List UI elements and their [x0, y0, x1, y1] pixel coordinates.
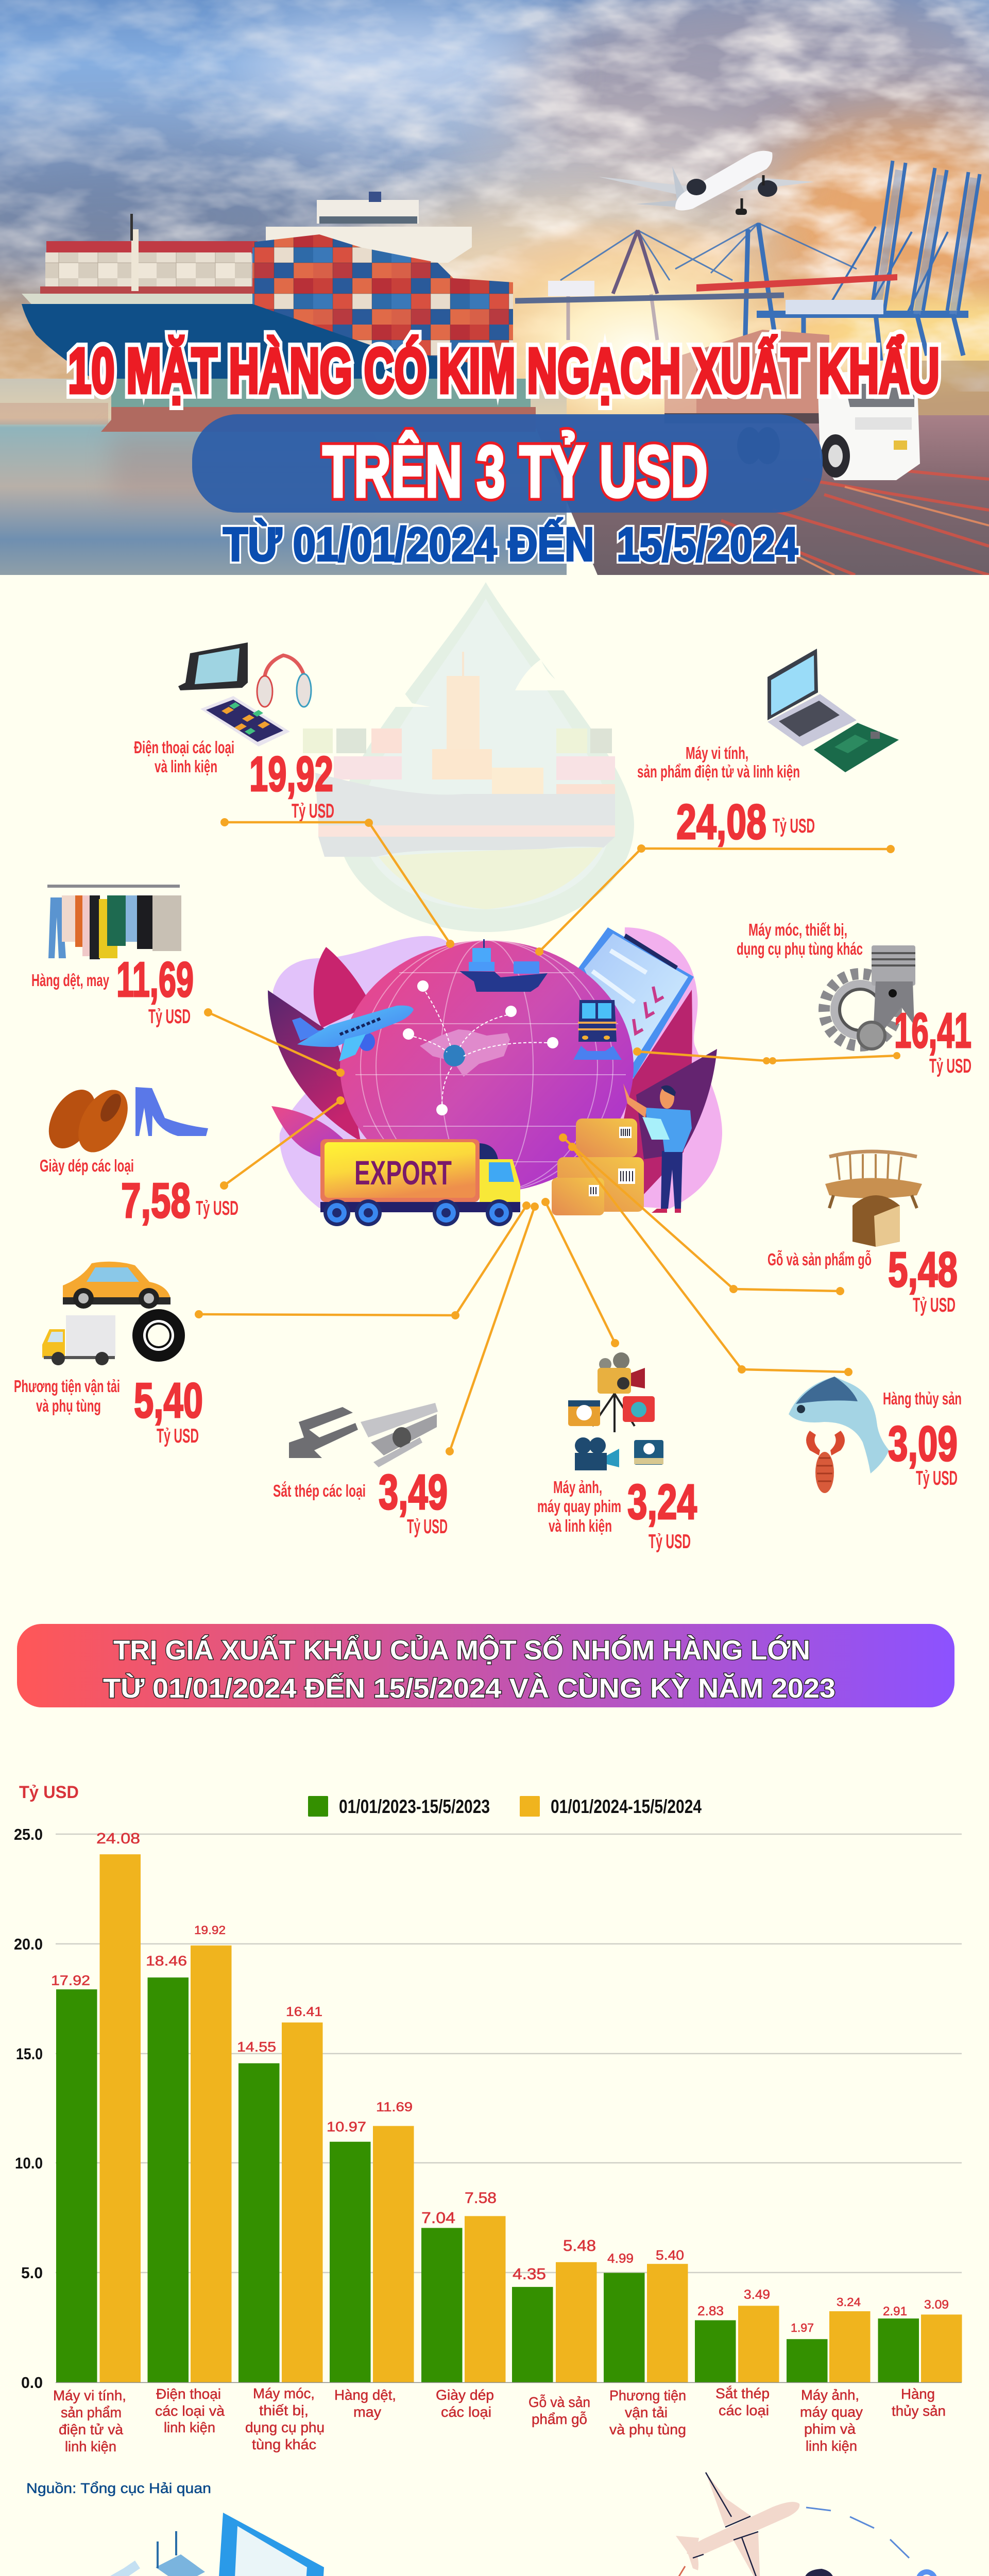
- chart banner: TRỊ GIÁ XUẤT KHẨU CỦA MỘT SỐ NHÓM HÀNG LỚN: [113, 1634, 810, 1666]
- globe grid: [355, 940, 626, 1193]
- label: machinery: [737, 920, 863, 958]
- label and value: cameras: Tỷ USD: [649, 1531, 691, 1553]
- leaf: dark purple right: [636, 1049, 717, 1159]
- label and value: seafood: [883, 1389, 962, 1489]
- chart unit label: Tỷ USD: [19, 1783, 79, 1802]
- chart banner: [17, 1624, 954, 1707]
- category labels: Máy ảnh,: [801, 2387, 859, 2403]
- label and value: textiles: [31, 952, 194, 1028]
- bar value labels: 3.09: [924, 2298, 949, 2312]
- label and value: cameras: 3,24: [627, 1475, 697, 1530]
- y axis labels: 10.0: [15, 2154, 43, 2172]
- airplane: [292, 1006, 414, 1061]
- icon: laptop and circuit board: [768, 649, 899, 772]
- value: machinery: [894, 1003, 971, 1077]
- leaf: pink lower left: [271, 1106, 350, 1159]
- leader lines: [195, 818, 900, 1455]
- label and value: steel: [273, 1465, 448, 1538]
- parcels: [552, 1118, 644, 1215]
- category labels: thủy sản: [892, 2403, 946, 2419]
- truck with container: [664, 330, 920, 480]
- value: phones: 19,92: [249, 747, 333, 802]
- label and value: wood: [768, 1242, 958, 1316]
- value: computers: 24,08: [676, 794, 766, 850]
- bar value labels: 2.83: [697, 2304, 724, 2318]
- clipboard: [578, 927, 694, 1078]
- background emblem: teardrop ship: [303, 582, 634, 932]
- label and value: cameras: và linh kiện: [549, 1516, 612, 1535]
- cargo ship: [459, 939, 548, 992]
- label and value: textiles: Hàng dệt, may: [31, 971, 109, 990]
- label and value: seafood: Tỷ USD: [916, 1467, 958, 1489]
- label and value: footwear: [40, 1156, 238, 1228]
- crane red boom: [696, 274, 897, 292]
- airplane: [676, 2472, 799, 2576]
- category labels: máy quay: [800, 2404, 863, 2420]
- value: phones: [249, 747, 334, 822]
- value: computers: Tỷ USD: [773, 815, 815, 837]
- category labels: Hàng dệt,: [334, 2387, 396, 2403]
- blue map pin: [916, 2569, 937, 2576]
- label and value: wood: Tỷ USD: [913, 1294, 956, 1316]
- category labels: các loại: [441, 2404, 491, 2420]
- label: machinery: dụng cụ phụ tùng khác: [737, 939, 863, 958]
- bar value labels: 24.08: [96, 1831, 140, 1847]
- label and value: footwear: 7,58: [121, 1173, 191, 1228]
- label and value: wood: 5,48: [888, 1242, 958, 1297]
- chart legend: [308, 1796, 702, 1817]
- leaf: magenta left: [314, 947, 371, 1028]
- bar value labels: 5.48: [563, 2236, 596, 2255]
- label and value: steel: Sắt thép các loại: [273, 1481, 366, 1500]
- category labels: Phương tiện: [609, 2387, 686, 2403]
- bar value labels: 18.46: [146, 1953, 187, 1969]
- delivery truck: [320, 1139, 520, 1226]
- train: [573, 1000, 622, 1060]
- category labels: phẩm gỗ: [532, 2411, 587, 2427]
- bar value labels: 16.41: [286, 2005, 322, 2019]
- illustration: technicians repairing a smartphone: [0, 2513, 324, 2576]
- category labels: may: [353, 2404, 381, 2420]
- bar value labels: 1.97: [791, 2321, 814, 2334]
- category labels: các loại: [719, 2402, 769, 2418]
- bar value labels: 17.92: [51, 1973, 90, 1988]
- category labels: phim và: [804, 2421, 856, 2437]
- bar value labels: 7.04: [421, 2209, 455, 2227]
- bar value labels: 5.40: [656, 2247, 684, 2263]
- label and value: textiles: Tỷ USD: [148, 1006, 191, 1028]
- icon: shoes and heels: [39, 1081, 208, 1161]
- y axis labels: 15.0: [16, 2045, 43, 2063]
- y axis labels: 5.0: [21, 2264, 43, 2282]
- title: line 2: TRÊN 3 TỶ USD: [322, 431, 708, 513]
- label and value: vehicles: và phụ tùng: [36, 1396, 101, 1415]
- label and value: vehicles: Tỷ USD: [157, 1425, 199, 1447]
- label and value: cameras: máy quay phim: [537, 1497, 621, 1516]
- label: phones: [134, 738, 234, 776]
- icon: film and photo cameras: [568, 1352, 663, 1470]
- icon: car, truck and tyre: [42, 1262, 185, 1365]
- category labels: linh kiện: [65, 2438, 116, 2454]
- icon: wooden bench and stump: [825, 1151, 922, 1247]
- panel: header photo: [0, 0, 989, 575]
- green bars: 2023: [56, 1977, 919, 2382]
- bar value labels: 7.58: [465, 2190, 497, 2207]
- leaf: magenta right: [608, 990, 692, 1200]
- category labels: tùng khác: [252, 2436, 316, 2452]
- label and value: footwear: Tỷ USD: [196, 1197, 238, 1219]
- label and value: seafood: 3,09: [888, 1416, 958, 1471]
- label: computers: Máy vi tính,: [686, 743, 748, 762]
- category labels: sản phẩm: [61, 2404, 122, 2420]
- bar value labels: 3.24: [837, 2295, 861, 2309]
- label and value: cameras: Máy ảnh,: [553, 1478, 602, 1497]
- chart legend: 01/01/2024-15/5/2024: [551, 1796, 702, 1817]
- y axis labels: 0.0: [21, 2374, 43, 2392]
- monitor: [218, 2513, 324, 2576]
- source note: Nguồn: Tổng cục Hải quan: [26, 2480, 211, 2496]
- routes: [414, 992, 547, 1105]
- category labels: linh kiện: [806, 2438, 857, 2454]
- category labels: các loại và: [155, 2403, 225, 2419]
- label: computers: [637, 743, 800, 781]
- airplane: [598, 151, 814, 215]
- category labels: [53, 2385, 946, 2454]
- title: date range: TỪ 01/01/2024 ĐẾN 15/5/2024: [223, 518, 798, 571]
- wrench: [88, 2561, 140, 2576]
- pink blob: [618, 927, 722, 1209]
- bar value labels: 2.91: [883, 2304, 907, 2318]
- label and value: footwear: Giày dép các loại: [40, 1156, 134, 1175]
- central illustration: export globe: [268, 927, 722, 1226]
- category labels: Điện thoại: [156, 2386, 221, 2402]
- bar value labels: 14.55: [237, 2039, 276, 2055]
- bar value labels: 3.49: [744, 2287, 770, 2302]
- globe: [340, 940, 634, 1193]
- icon: gear and piston: [824, 945, 915, 1049]
- label and value: vehicles: 5,40: [134, 1373, 203, 1428]
- icon: fish and lobster: [789, 1377, 889, 1493]
- leaf: dark purple left: [268, 990, 361, 1141]
- y axis labels: [14, 1825, 43, 2392]
- road: [531, 415, 989, 575]
- bar value labels: 19.92: [194, 1923, 226, 1937]
- icon: clothes on a rail: [47, 885, 181, 959]
- lavender blob: [273, 936, 453, 1208]
- category labels: linh kiện: [164, 2419, 215, 2435]
- label: phones: Điện thoại các loại: [134, 738, 234, 757]
- label and value: cameras: [537, 1475, 697, 1553]
- illustration: logistics officer and containers: [593, 2472, 989, 2576]
- label and value: steel: Tỷ USD: [407, 1516, 448, 1538]
- category labels: Sắt thép: [715, 2385, 770, 2401]
- category labels: và phụ tùng: [609, 2421, 686, 2437]
- bar value labels: 4.35: [513, 2265, 546, 2283]
- chart legend: 01/01/2023-15/5/2023: [339, 1796, 490, 1817]
- white route points: [403, 980, 558, 1115]
- yellow bars: 2024: [100, 1854, 962, 2382]
- bar value labels: 4.99: [607, 2251, 634, 2266]
- label and value: steel: 3,49: [379, 1465, 448, 1520]
- cranes: [515, 161, 980, 361]
- label and value: wood: Gỗ và sản phẩm gỗ: [768, 1250, 872, 1269]
- flight route arcs: [806, 2507, 909, 2558]
- value: phones: Tỷ USD: [292, 800, 334, 822]
- y axis labels: 25.0: [14, 1825, 43, 1843]
- label: phones: và linh kiện: [155, 757, 217, 776]
- title: date range: TỪ 01/01/2024 ĐẾN 15/5/2024: [223, 518, 798, 571]
- icon: steel beams and pipes: [289, 1403, 438, 1467]
- label: computers: sản phẩm điện tử và linh kiện: [637, 762, 800, 781]
- icon: tablet, headphones and smartphone: [178, 642, 311, 747]
- category labels: Giày dép: [436, 2387, 494, 2403]
- category labels: Gỗ và sản: [528, 2394, 590, 2410]
- category labels: dụng cụ phụ: [245, 2419, 325, 2435]
- bar value labels: [51, 1831, 949, 2334]
- category labels: điện tử và: [59, 2421, 123, 2437]
- chart banner: TỪ 01/01/2024 ĐẾN 15/5/2024 VÀ CÙNG KỲ NĂM 2023: [103, 1673, 835, 1704]
- category labels: Máy vi tính,: [53, 2387, 126, 2403]
- bar chart: [14, 1825, 962, 2454]
- officer: [696, 2569, 876, 2576]
- label and value: vehicles: Phương tiện vận tải: [14, 1377, 120, 1396]
- water and haze below the ship: [0, 379, 567, 575]
- category labels: vận tải: [625, 2404, 668, 2420]
- export label: EXPORT: [354, 1154, 452, 1192]
- bar value labels: 10.97: [327, 2119, 366, 2134]
- category labels: Hàng: [901, 2386, 935, 2402]
- y axis labels: 20.0: [14, 1935, 43, 1953]
- bar value labels: 11.69: [376, 2100, 413, 2114]
- title: line 2: TRÊN 3 TỶ USD: [322, 431, 708, 513]
- category labels: Máy móc,: [253, 2385, 315, 2401]
- label: machinery: Máy móc, thiết bị,: [748, 920, 847, 939]
- worker with headset: [623, 1083, 692, 1213]
- title pill: [192, 414, 823, 513]
- label and value: vehicles: [14, 1373, 203, 1447]
- router: [156, 2554, 205, 2576]
- label and value: textiles: 11,69: [116, 952, 194, 1007]
- container ship: [22, 192, 536, 432]
- map: [420, 1029, 510, 1077]
- category labels: thiết bị,: [259, 2402, 309, 2418]
